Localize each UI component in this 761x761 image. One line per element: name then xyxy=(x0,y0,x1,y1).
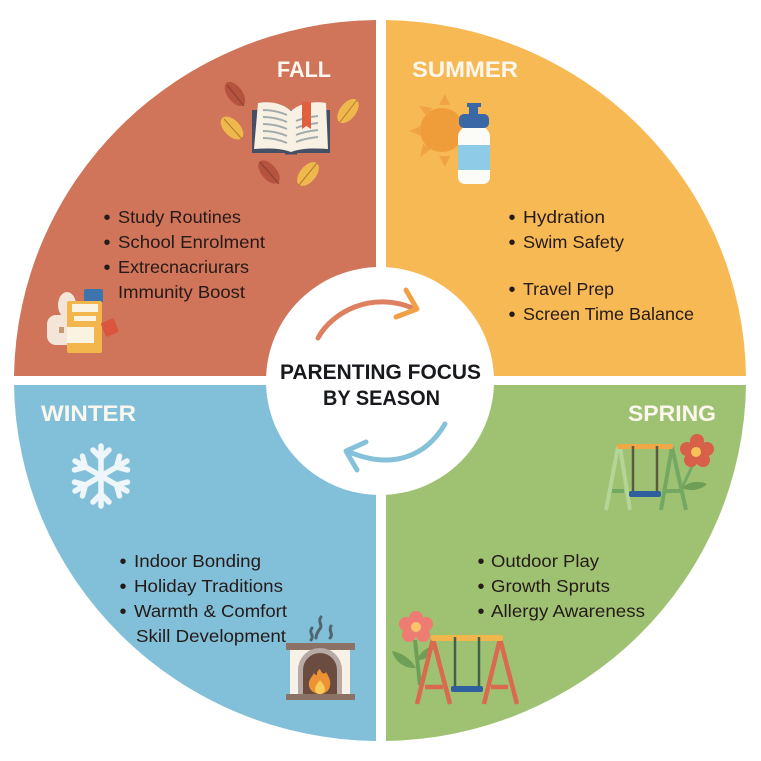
icon: book and leaves xyxy=(217,78,363,190)
text: summer list xyxy=(508,207,694,326)
text: spring list: Outdoor Play xyxy=(491,551,599,571)
text: winter list: • xyxy=(120,551,127,573)
panel: fall xyxy=(14,20,376,376)
text: fall list xyxy=(104,207,265,302)
arrow: spring to winter xyxy=(346,424,445,470)
text: summer list: Screen Time Balance xyxy=(523,304,694,324)
text: fall list: Study Routines xyxy=(118,207,241,227)
title: BY SEASON xyxy=(323,387,440,410)
panel: winter xyxy=(14,385,376,741)
icon: red swing and flower xyxy=(392,611,517,704)
title: PARENTING FOCUS xyxy=(280,361,481,384)
text: winter list: • xyxy=(120,601,127,623)
heading: winter: WINTER xyxy=(41,401,136,426)
panel: spring xyxy=(386,385,746,741)
text: winter list xyxy=(120,551,287,646)
text: winter list: Skill Development xyxy=(136,626,286,646)
text: fall list: School Enrolment xyxy=(118,232,265,252)
text: spring list: • xyxy=(478,551,485,573)
text: summer list: Swim Safety xyxy=(523,232,624,252)
icon: green swing and flower xyxy=(606,434,714,510)
heading: summer: SUMMER xyxy=(412,57,518,82)
text: fall list: • xyxy=(104,257,111,279)
icon: snowflake xyxy=(71,446,131,506)
text: fall list: Immunity Boost xyxy=(118,282,245,302)
text: summer list: • xyxy=(508,304,516,326)
text: winter list: Indoor Bonding xyxy=(134,551,261,571)
text: summer list: Travel Prep xyxy=(523,279,614,299)
text: summer list: Hydration xyxy=(523,207,605,227)
panel: center hub xyxy=(266,267,494,495)
text: fall list: • xyxy=(104,207,111,229)
text: winter list: Warmth & Comfort xyxy=(134,601,287,621)
heading: fall: FALL xyxy=(277,57,331,82)
title xyxy=(280,361,481,410)
panel: summer xyxy=(386,20,746,376)
icon: sun and water bottle xyxy=(409,94,490,184)
icon: tissues and medicine xyxy=(47,289,119,353)
icon: fireplace xyxy=(286,617,355,700)
text: fall list: Extrecnacriurars xyxy=(118,257,249,277)
text: winter list: • xyxy=(120,576,127,598)
text: spring list xyxy=(478,551,645,623)
text: fall list: • xyxy=(104,232,111,254)
text: spring list: Growth Spruts xyxy=(491,576,610,596)
heading: spring: SPRING xyxy=(628,401,716,426)
arrow: fall to summer xyxy=(318,290,417,338)
text: spring list: Allergy Awareness xyxy=(491,601,645,621)
text: winter list: Holiday Traditions xyxy=(134,576,283,596)
text: summer list: • xyxy=(508,279,516,301)
text: summer list: • xyxy=(508,207,516,229)
text: spring list: • xyxy=(478,576,485,598)
text: summer list: • xyxy=(508,232,516,254)
text: spring list: • xyxy=(478,601,485,623)
